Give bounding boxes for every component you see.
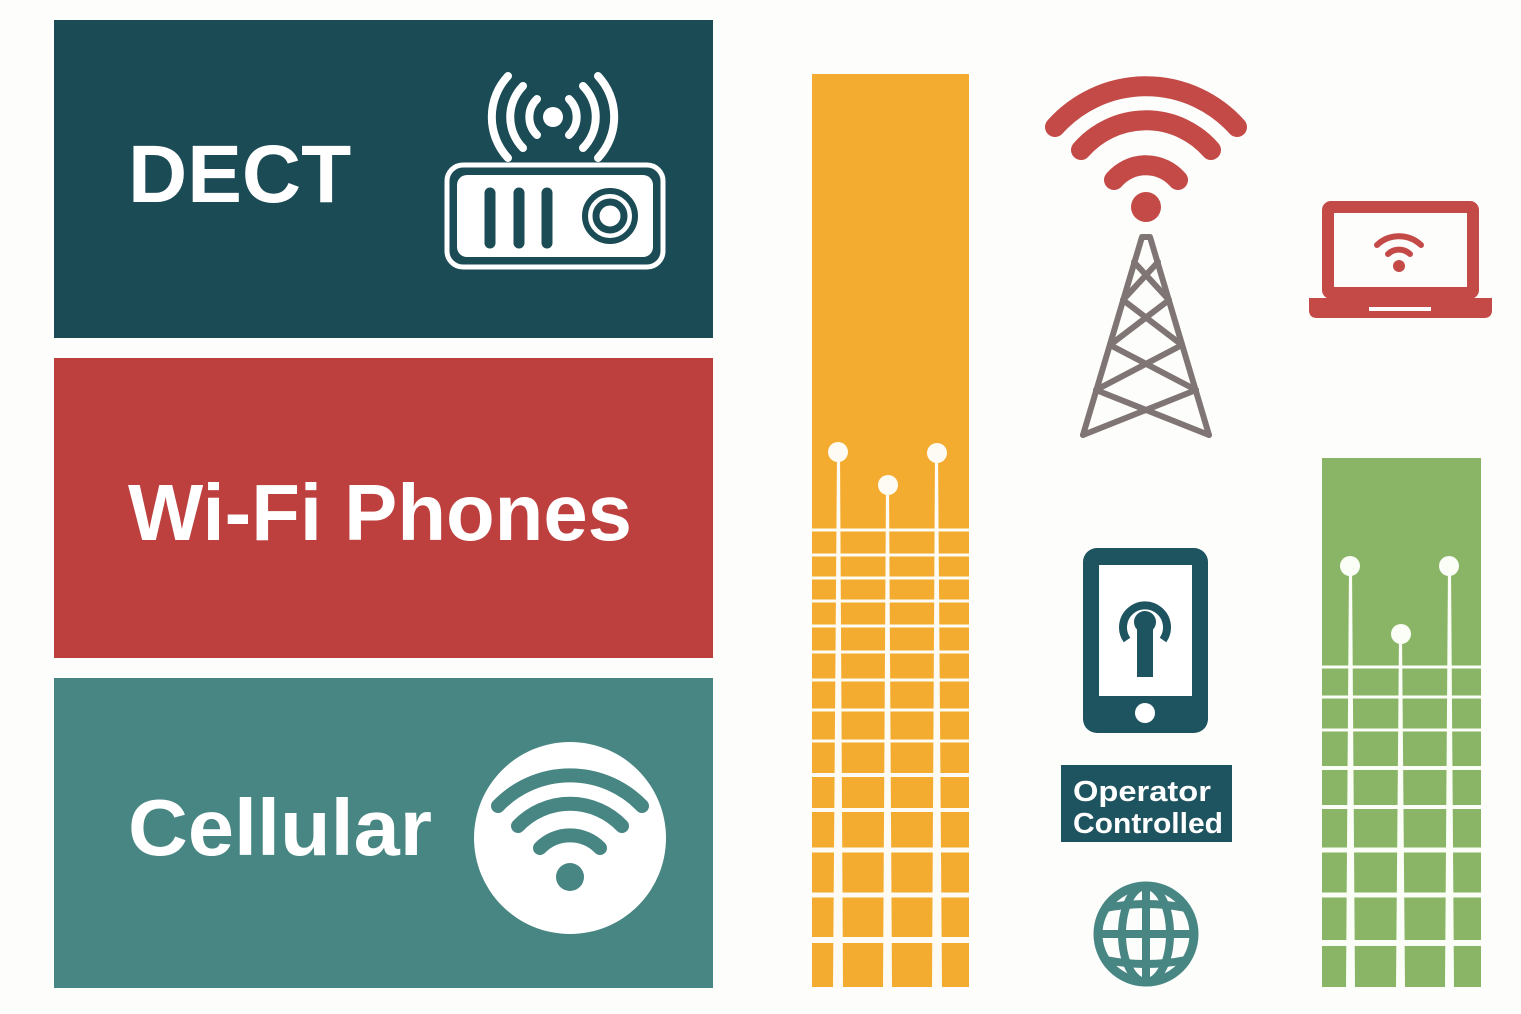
- label: Operator Controlled: Controlled: [1073, 808, 1223, 840]
- icon: wifi circle: [474, 742, 666, 934]
- panel: DECT: [54, 20, 713, 338]
- icon: DECT base station: [447, 76, 663, 267]
- heading: Wi-Fi Phones: Wi-Fi Phones: [128, 468, 632, 557]
- label: Operator Controlled: [1061, 765, 1232, 842]
- icon: globe: [1098, 886, 1194, 982]
- heading: Cellular: Cellular: [128, 783, 432, 872]
- panel: Cellular: [54, 678, 713, 988]
- icon: phone: [1083, 548, 1208, 733]
- label: Operator Controlled: Operator: [1073, 776, 1211, 808]
- panel: Wi-Fi Phones: [54, 358, 713, 658]
- icon: wifi tower: [1055, 86, 1237, 435]
- heading: DECT: DECT: [128, 129, 351, 220]
- chart: green bar: [1322, 458, 1481, 987]
- icon: laptop: [1309, 207, 1492, 318]
- chart: yellow bar: [812, 74, 969, 987]
